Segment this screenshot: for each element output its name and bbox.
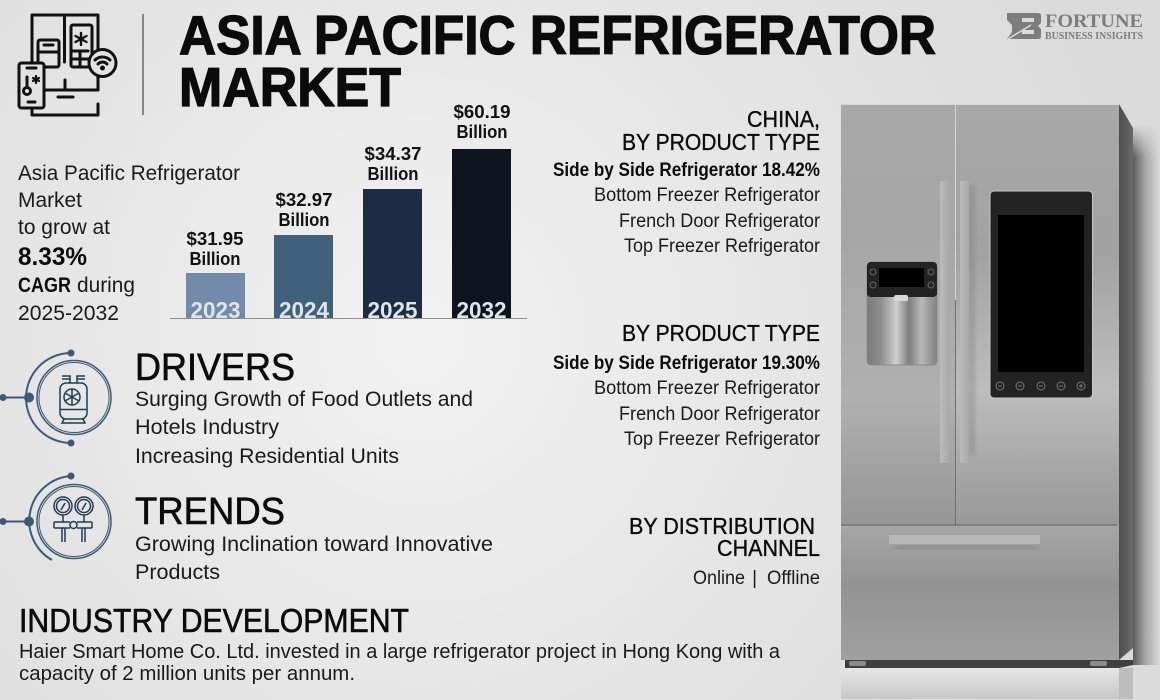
bar 2025 (363, 144, 422, 323)
logo: Fortune Business Insights: FORTUNE (1045, 11, 1143, 32)
drivers text: Surging Growth of Food Outlets and (135, 388, 473, 411)
trends heading: TRENDS (135, 491, 285, 533)
cast shadow (1133, 125, 1160, 665)
logo: Fortune Business Insights: BUSINESS INSIGHTS (1045, 31, 1143, 42)
text: CAGR callout: Market (18, 189, 82, 212)
bar 2025: Billion (368, 164, 418, 184)
bar 2032: $60.19 (454, 102, 510, 122)
bar 2032 (452, 102, 511, 323)
text: CAGR callout: Asia Pacific Refrigerator (18, 162, 240, 185)
text: CAGR callout: 8.33% (18, 243, 87, 271)
panel: by distribution channel: Online (693, 568, 745, 589)
bar 2023: Billion (190, 249, 240, 269)
water dispenser (867, 262, 937, 365)
title: ASIA PACIFIC REFRIGERATOR (179, 4, 936, 66)
panel: by distribution channel (629, 513, 820, 589)
drivers text: Hotels Industry (135, 416, 280, 439)
panel: by distribution channel: Offline (767, 568, 820, 589)
panel: by distribution channel: CHANNEL (717, 535, 820, 561)
panel: China by product type: CHINA, (747, 106, 820, 132)
bar 2032: Billion (456, 122, 508, 142)
panel: China by product type: Top Freezer Refrigerator (624, 236, 821, 257)
panel: by product type: Top Freezer Refrigerator (624, 429, 821, 450)
text: CAGR callout: CAGR (18, 274, 71, 297)
door handles (940, 181, 950, 463)
floor reflection (841, 668, 1133, 699)
icon: refrigerant cylinder (0, 350, 111, 446)
screen buttons (996, 382, 1085, 390)
text: CAGR callout (18, 162, 240, 325)
title (179, 4, 936, 118)
text: CAGR callout: 2025-2032 (18, 302, 119, 325)
text: CAGR callout: during (77, 274, 135, 297)
bar chart (170, 102, 527, 323)
panel: China by product type: French Door Refrigerator (619, 211, 821, 232)
left door (841, 104, 955, 525)
panel: by distribution channel: | (752, 568, 757, 589)
bottom drawer (841, 525, 1119, 660)
panel: by distribution channel: BY DISTRIBUTION (629, 513, 815, 539)
industry development heading: INDUSTRY DEVELOPMENT (19, 602, 409, 639)
handle shadows (968, 185, 975, 455)
bar 2032: 2032 (456, 297, 506, 323)
trends text (135, 533, 493, 584)
bar 2024: Billion (278, 210, 330, 230)
side panel (1119, 104, 1133, 660)
drivers heading: DRIVERS (135, 347, 295, 389)
panel: by product type: BY PRODUCT TYPE (622, 320, 820, 346)
smart screen (990, 191, 1092, 398)
icon: manifold gauges (0, 473, 111, 560)
bar 2025: $34.37 (364, 144, 422, 164)
industry development text (19, 641, 781, 685)
industry development text: Haier Smart Home Co. Ltd. invested in a large refrigerator project in Hong Kong with a (19, 641, 781, 663)
bar 2023 (186, 229, 245, 323)
bar 2023: $31.95 (186, 229, 244, 249)
panel: China by product type: Bottom Freezer Refrigerator (594, 185, 821, 206)
bar 2024: $32.97 (276, 190, 332, 210)
divider line (142, 14, 144, 115)
text: CAGR callout: to grow at (18, 216, 110, 239)
panel: by product type: French Door Refrigerator (619, 404, 821, 425)
panel: China by product type (553, 106, 821, 257)
bar 2023: 2023 (190, 297, 240, 323)
illustration: stainless steel refrigerator (841, 104, 1160, 699)
icon: smart refrigerator (19, 15, 116, 115)
bar 2024 (274, 190, 333, 323)
bar 2024: 2024 (279, 297, 329, 323)
title: MARKET (179, 56, 401, 118)
trends text: Growing Inclination toward Innovative (135, 533, 493, 556)
right door (955, 104, 1119, 525)
logo: Fortune Business Insights (1007, 11, 1143, 42)
feet (849, 661, 866, 666)
drivers text: Increasing Residential Units (135, 445, 399, 468)
panel: by product type: Side by Side Refrigerator 19.30% (553, 353, 820, 374)
panel: China by product type: BY PRODUCT TYPE (622, 129, 820, 155)
panel: by product type: Bottom Freezer Refrigerator (594, 378, 821, 399)
panel: by product type (553, 320, 821, 450)
industry development text: capacity of 2 million units per annum. (19, 663, 355, 685)
drivers text (135, 388, 473, 468)
bar 2025: 2025 (368, 297, 418, 323)
drawer handle (889, 535, 1040, 544)
panel: China by product type: Side by Side Refrigerator 18.42% (553, 160, 820, 181)
trends text: Products (135, 561, 220, 584)
